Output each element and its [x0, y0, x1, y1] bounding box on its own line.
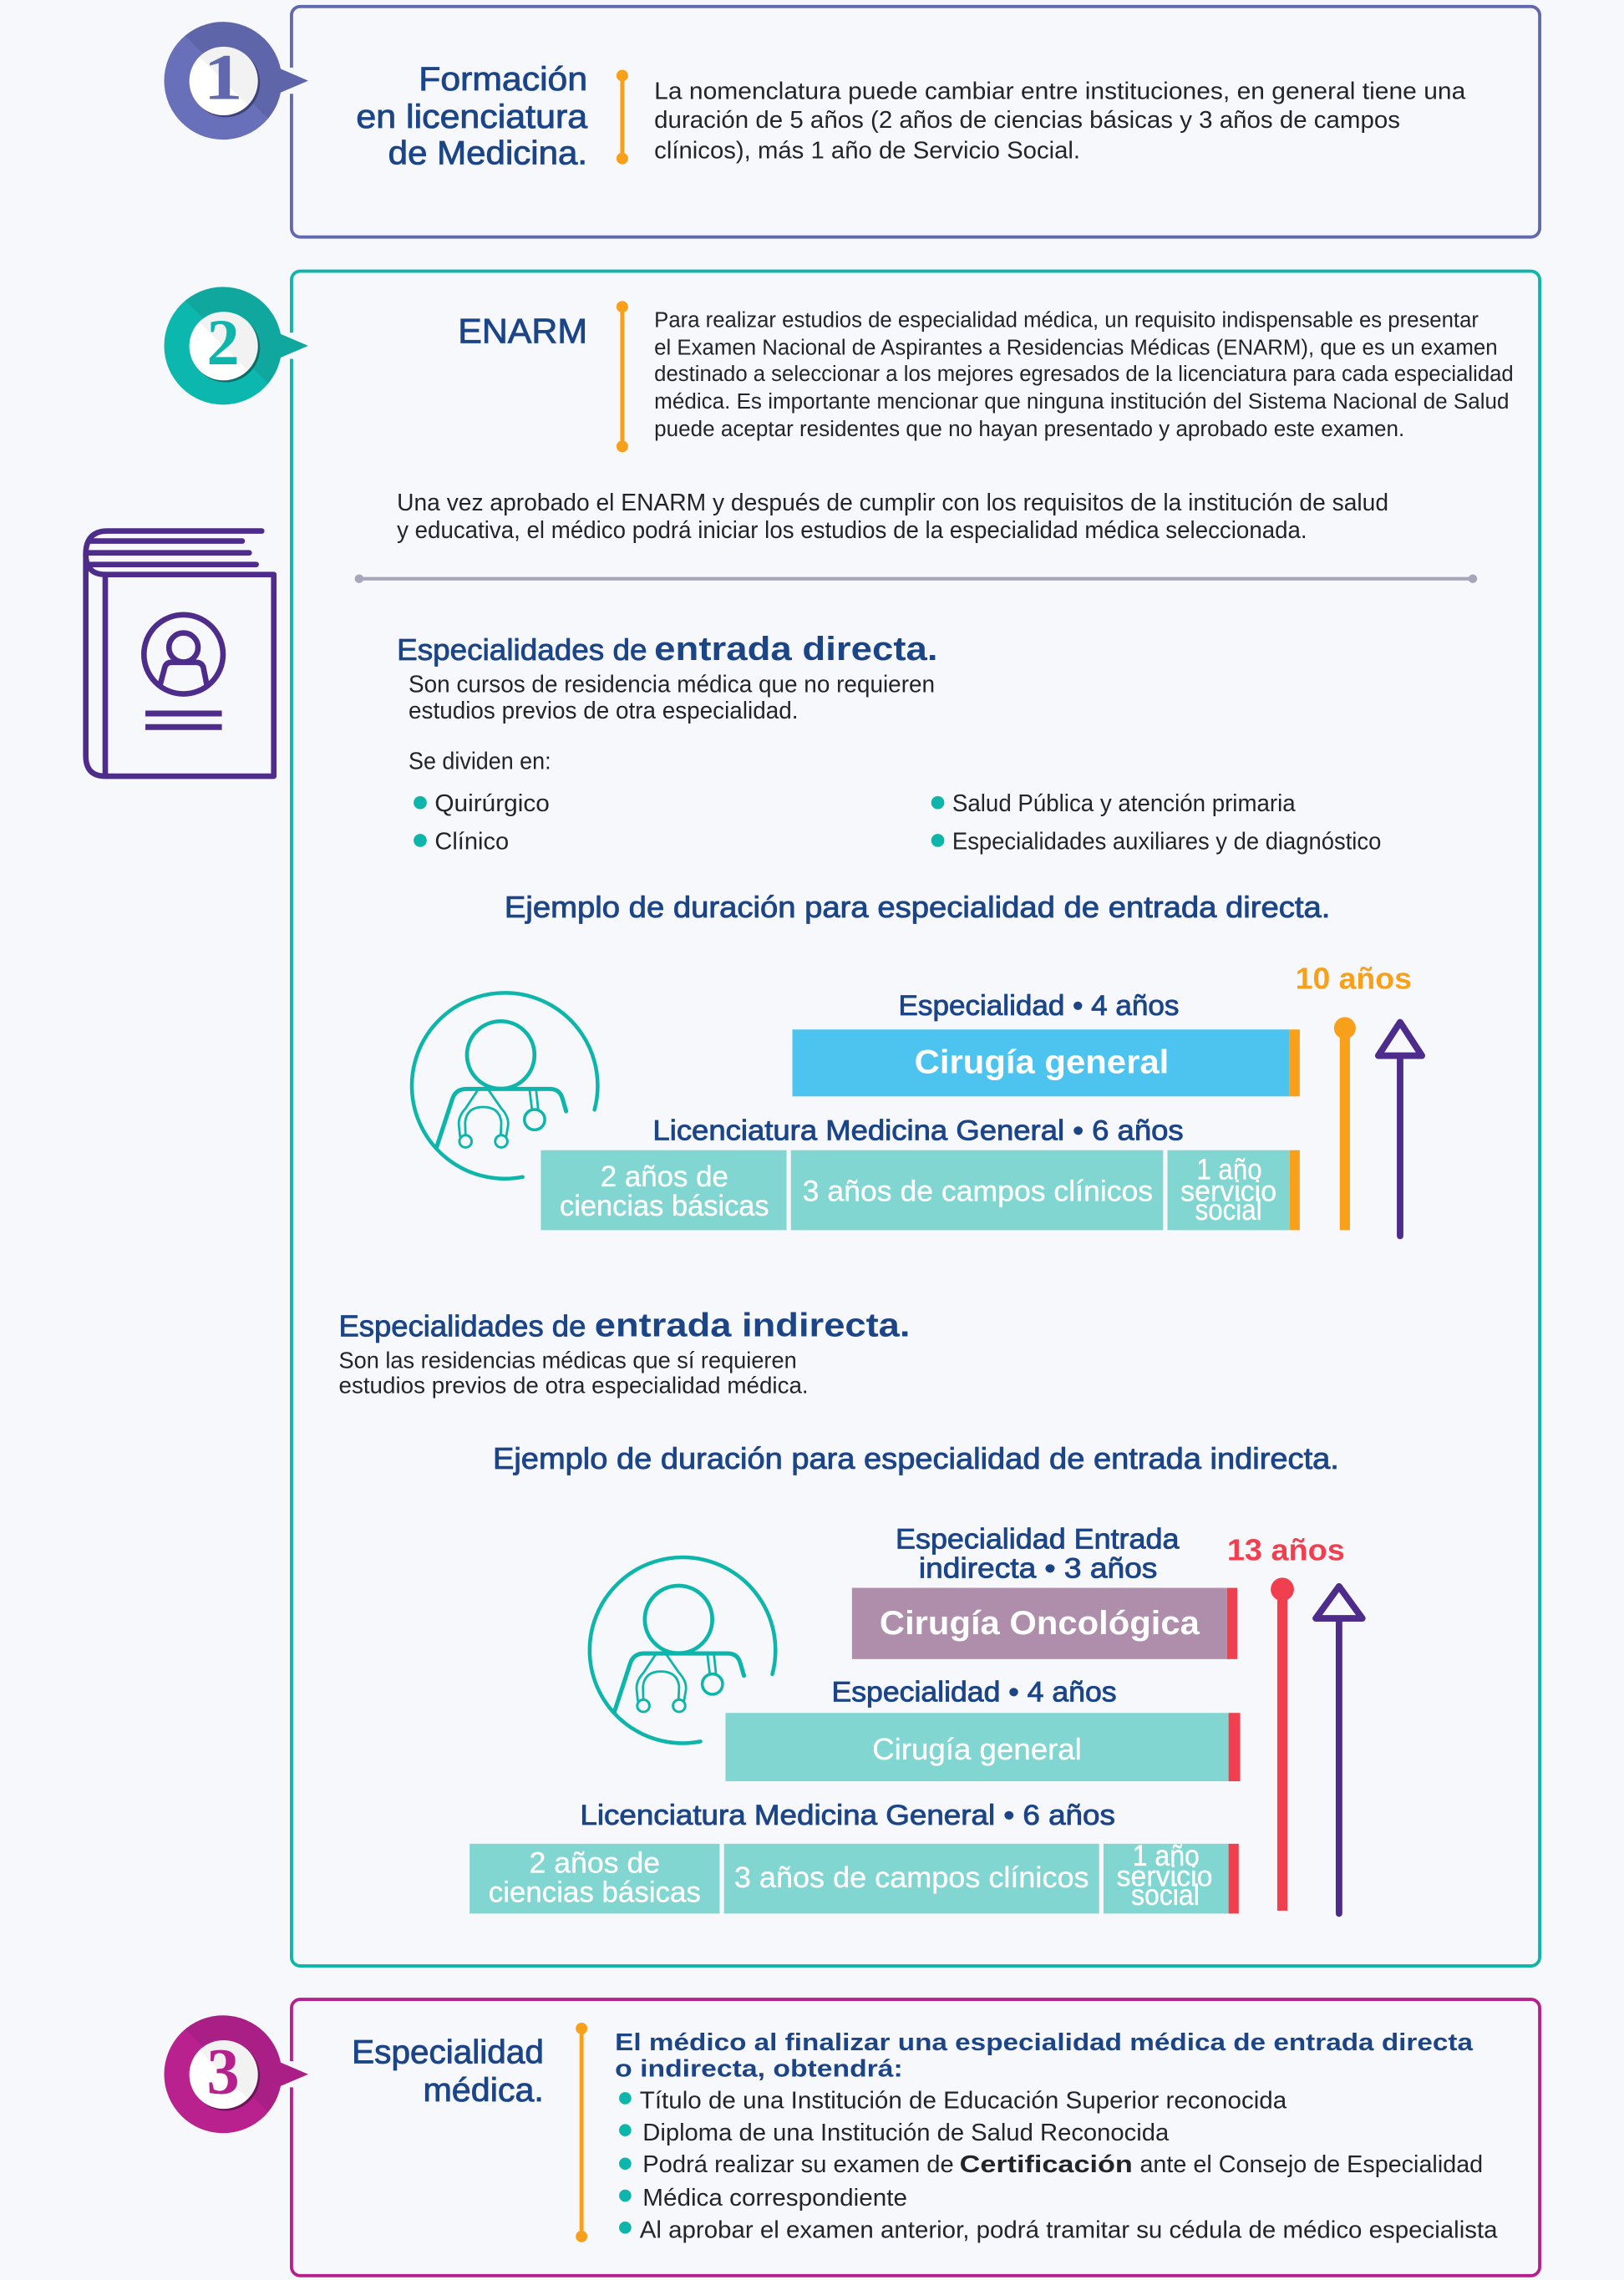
bar: licenciatura segments: ciencias básicas — [489, 1876, 701, 1908]
icon: book — [86, 531, 274, 776]
heading: formación: en licenciatura — [356, 99, 588, 135]
ENARM body text — [654, 307, 1514, 441]
badge 3: 3 — [207, 2035, 240, 2108]
lead text: o indirecta, obtendrá: — [615, 2055, 903, 2082]
bar: licenciatura segments: social — [1131, 1879, 1200, 1912]
bar: licenciatura segments: servicio — [1180, 1176, 1276, 1208]
label: licenciatura 6 años: Licenciatura Medicina General • 6 años — [580, 1800, 1115, 1831]
lead text — [615, 2029, 1474, 2082]
panel 3: especialidad médica — [164, 1999, 1540, 2276]
entrada indirecta description — [339, 1348, 809, 1398]
bar: licenciatura segments: 3 años de campos clínicos — [734, 1861, 1089, 1894]
bar: cirugía general: Cirugía general — [872, 1732, 1082, 1766]
bar: licenciatura segments: social — [1195, 1194, 1262, 1226]
body text: La nomenclatura puede cambiar entre instituciones, en general tiene una — [654, 78, 1465, 104]
label: especialidad 4 años: Especialidad • 4 años — [831, 1676, 1117, 1708]
heading: entrada indirecta: Especialidades de — [339, 1308, 586, 1343]
entrada directa description: Son cursos de residencia médica que no requieren — [409, 671, 935, 698]
division list: Salud Pública y atención primaria — [952, 790, 1296, 817]
heading: entrada indirecta — [339, 1307, 910, 1343]
label: especialidad 4 años: Especialidad • 4 años — [899, 990, 1179, 1022]
arrow up — [1378, 1023, 1422, 1236]
panel 1: formación en licenciatura — [164, 7, 1540, 237]
bar: licenciatura segments: 2 años de — [529, 1847, 660, 1880]
heading: entrada directa: Especialidades de — [397, 632, 647, 667]
badge 1 — [164, 22, 308, 140]
bar: cirugía oncológica — [852, 1588, 1237, 1659]
bar: licenciatura segments: 1 año — [1196, 1153, 1262, 1186]
label: especialidad entrada indirecta: indirecta • 3 años — [919, 1552, 1157, 1584]
division list: Clínico — [434, 828, 509, 855]
timeline marker red — [1271, 1577, 1294, 1911]
bar: licenciatura segments — [540, 1150, 1300, 1230]
heading: especialidad médica: Especialidad — [352, 2034, 544, 2071]
badge 2 — [164, 287, 308, 404]
bar: licenciatura segments: 2 años de — [601, 1160, 728, 1193]
bar: cirugía general — [793, 1029, 1300, 1096]
heading: entrada directa: entrada directa. — [654, 631, 938, 668]
list of results: Al aprobar el examen anterior, podrá tramitar su cédula de médico especialista — [640, 2217, 1498, 2244]
division list — [414, 790, 1381, 855]
label: especialidad entrada indirecta: Especialidad Entrada — [896, 1524, 1180, 1556]
badge 3 — [164, 2015, 308, 2133]
heading: ENARM: ENARM — [458, 312, 587, 351]
label: especialidad entrada indirecta — [896, 1524, 1180, 1584]
intro paragraph: Una vez aprobado el ENARM y después de cumplir con los requisitos de la institución de salud — [397, 490, 1388, 516]
chart: entrada indirecta — [469, 1524, 1363, 1913]
arrow up — [1316, 1587, 1363, 1913]
bar: licenciatura segments: 1 año — [1133, 1840, 1200, 1872]
body text: duración de 5 años (2 años de ciencias básicas y 3 años de campos — [654, 107, 1400, 134]
lead text: El médico al finalizar una especialidad médica de entrada directa — [615, 2029, 1474, 2056]
bar: cirugía oncológica: Cirugía Oncológica — [880, 1605, 1200, 1642]
heading: especialidad médica: médica. — [423, 2072, 544, 2109]
ENARM body text: destinado a seleccionar a los mejores egresados de la licenciatura para cada especialidad — [654, 361, 1514, 386]
icon: doctor — [412, 993, 597, 1179]
total: 10 años: 10 años — [1296, 961, 1412, 995]
entrada indirecta description: Son las residencias médicas que sí requieren — [339, 1348, 797, 1374]
list of results: Título de una Institución de Educación Superior reconocida — [640, 2088, 1287, 2115]
badge 1: 1 — [204, 41, 243, 114]
orange divider — [617, 70, 627, 164]
list of results: Certificación — [960, 2151, 1133, 2178]
list of results — [619, 2088, 1498, 2244]
icon: doctor — [590, 1557, 775, 1743]
orange divider — [617, 302, 627, 451]
ENARM body text: puede aceptar residentes que no hayan presentado y aprobado este examen. — [654, 416, 1404, 441]
panel 2: ENARM and especialidades — [164, 272, 1540, 1966]
entrada directa description: Se dividen en: — [409, 749, 551, 775]
entrada directa description: estudios previos de otra especialidad. — [409, 698, 798, 724]
intro paragraph — [397, 490, 1388, 544]
heading: entrada directa — [397, 631, 938, 668]
heading: ejemplo indirecta: Ejemplo de duración para especialidad de entrada indirecta. — [493, 1442, 1339, 1475]
bar: licenciatura segments: servicio — [1117, 1860, 1212, 1892]
body text — [654, 78, 1465, 165]
list of results: Podrá realizar su examen de — [642, 2151, 954, 2178]
bar: licenciatura segments: ciencias básicas — [560, 1190, 769, 1222]
bar: licenciatura segments — [469, 1840, 1239, 1913]
division list: Especialidades auxiliares y de diagnóstico — [952, 828, 1381, 855]
ENARM body text: el Examen Nacional de Aspirantes a Residencias Médicas (ENARM), que es un examen — [654, 335, 1498, 360]
bar: cirugía general: Cirugía general — [915, 1044, 1169, 1080]
chart: entrada directa — [412, 961, 1422, 1236]
bar: cirugía general — [725, 1713, 1241, 1781]
division list: Quirúrgico — [434, 790, 550, 817]
heading: formación — [356, 61, 588, 172]
heading: formación: de Medicina. — [388, 135, 587, 172]
ENARM body text: Para realizar estudios de especialidad médica, un requisito indispensable es presentar — [654, 307, 1479, 333]
list of results: Diploma de una Institución de Salud Reconocida — [642, 2120, 1169, 2146]
entrada indirecta description: estudios previos de otra especialidad médica. — [339, 1372, 809, 1398]
list of results: Médica correspondiente — [642, 2185, 907, 2211]
heading: especialidad médica — [352, 2034, 544, 2109]
badge 2: 2 — [207, 306, 240, 378]
total: 13 años: 13 años — [1227, 1532, 1345, 1567]
ENARM body text: médica. Es importante mencionar que ninguna institución del Sistema Nacional de Salud — [654, 388, 1510, 414]
label: licenciatura 6 años: Licenciatura Medicina General • 6 años — [652, 1115, 1184, 1147]
body text: clínicos), más 1 año de Servicio Social. — [654, 138, 1080, 165]
entrada directa description — [409, 671, 935, 775]
bar: licenciatura segments: 3 años de campos clínicos — [803, 1176, 1153, 1208]
intro paragraph: y educativa, el médico podrá iniciar los estudios de la especialidad médica seleccionada. — [397, 517, 1307, 544]
orange divider — [576, 2024, 586, 2242]
heading: ejemplo directa: Ejemplo de duración para especialidad de entrada directa. — [505, 891, 1330, 924]
list of results: ante el Consejo de Especialidad — [1139, 2151, 1483, 2178]
heading: formación: Formación — [419, 61, 587, 98]
timeline marker orange — [1334, 1017, 1356, 1230]
heading: entrada indirecta: entrada indirecta. — [595, 1307, 910, 1343]
